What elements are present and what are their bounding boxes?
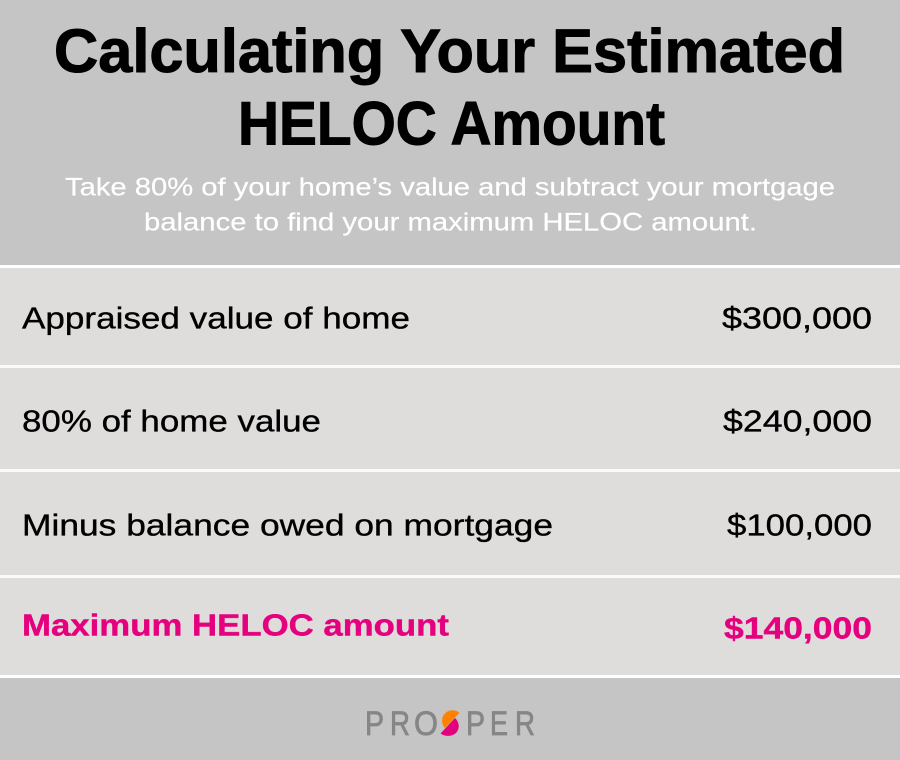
subtitle: balance to find your maximum HELOC amount. <box>144 208 757 236</box>
logo: Prosper: O <box>414 705 438 743</box>
row: appraised value: $300,000 <box>722 300 872 336</box>
row: maximum HELOC: $140,000 <box>724 610 872 646</box>
row: minus balance <box>22 508 872 542</box>
subtitle <box>65 174 835 236</box>
row: minus balance: $100,000 <box>727 508 872 542</box>
logo: Prosper: R <box>390 705 410 743</box>
row: 80 percent: 80% of home value <box>22 404 321 438</box>
subtitle: Take 80% of your home’s value and subtract your mortgage <box>65 174 835 202</box>
header panel <box>0 0 900 265</box>
icon: S mark <box>440 710 460 736</box>
logo: Prosper: R <box>515 705 535 743</box>
logo: Prosper: P <box>365 705 384 743</box>
title: HELOC Amount <box>238 90 665 158</box>
row: appraised value <box>22 300 872 336</box>
row: 80 percent <box>22 404 872 438</box>
logo: Prosper: E <box>490 705 508 743</box>
row: maximum HELOC: Maximum HELOC amount <box>22 608 449 642</box>
title <box>54 17 845 158</box>
row: 80 percent: $240,000 <box>723 404 872 438</box>
logo: Prosper: P <box>466 705 485 743</box>
logo: Prosper <box>365 705 535 743</box>
row: minus balance: Minus balance owed on mortgage <box>22 508 553 542</box>
row: appraised value: Appraised value of home <box>22 300 410 336</box>
row: maximum HELOC <box>22 608 872 646</box>
table <box>0 265 900 678</box>
title: Calculating Your Estimated <box>54 17 845 85</box>
